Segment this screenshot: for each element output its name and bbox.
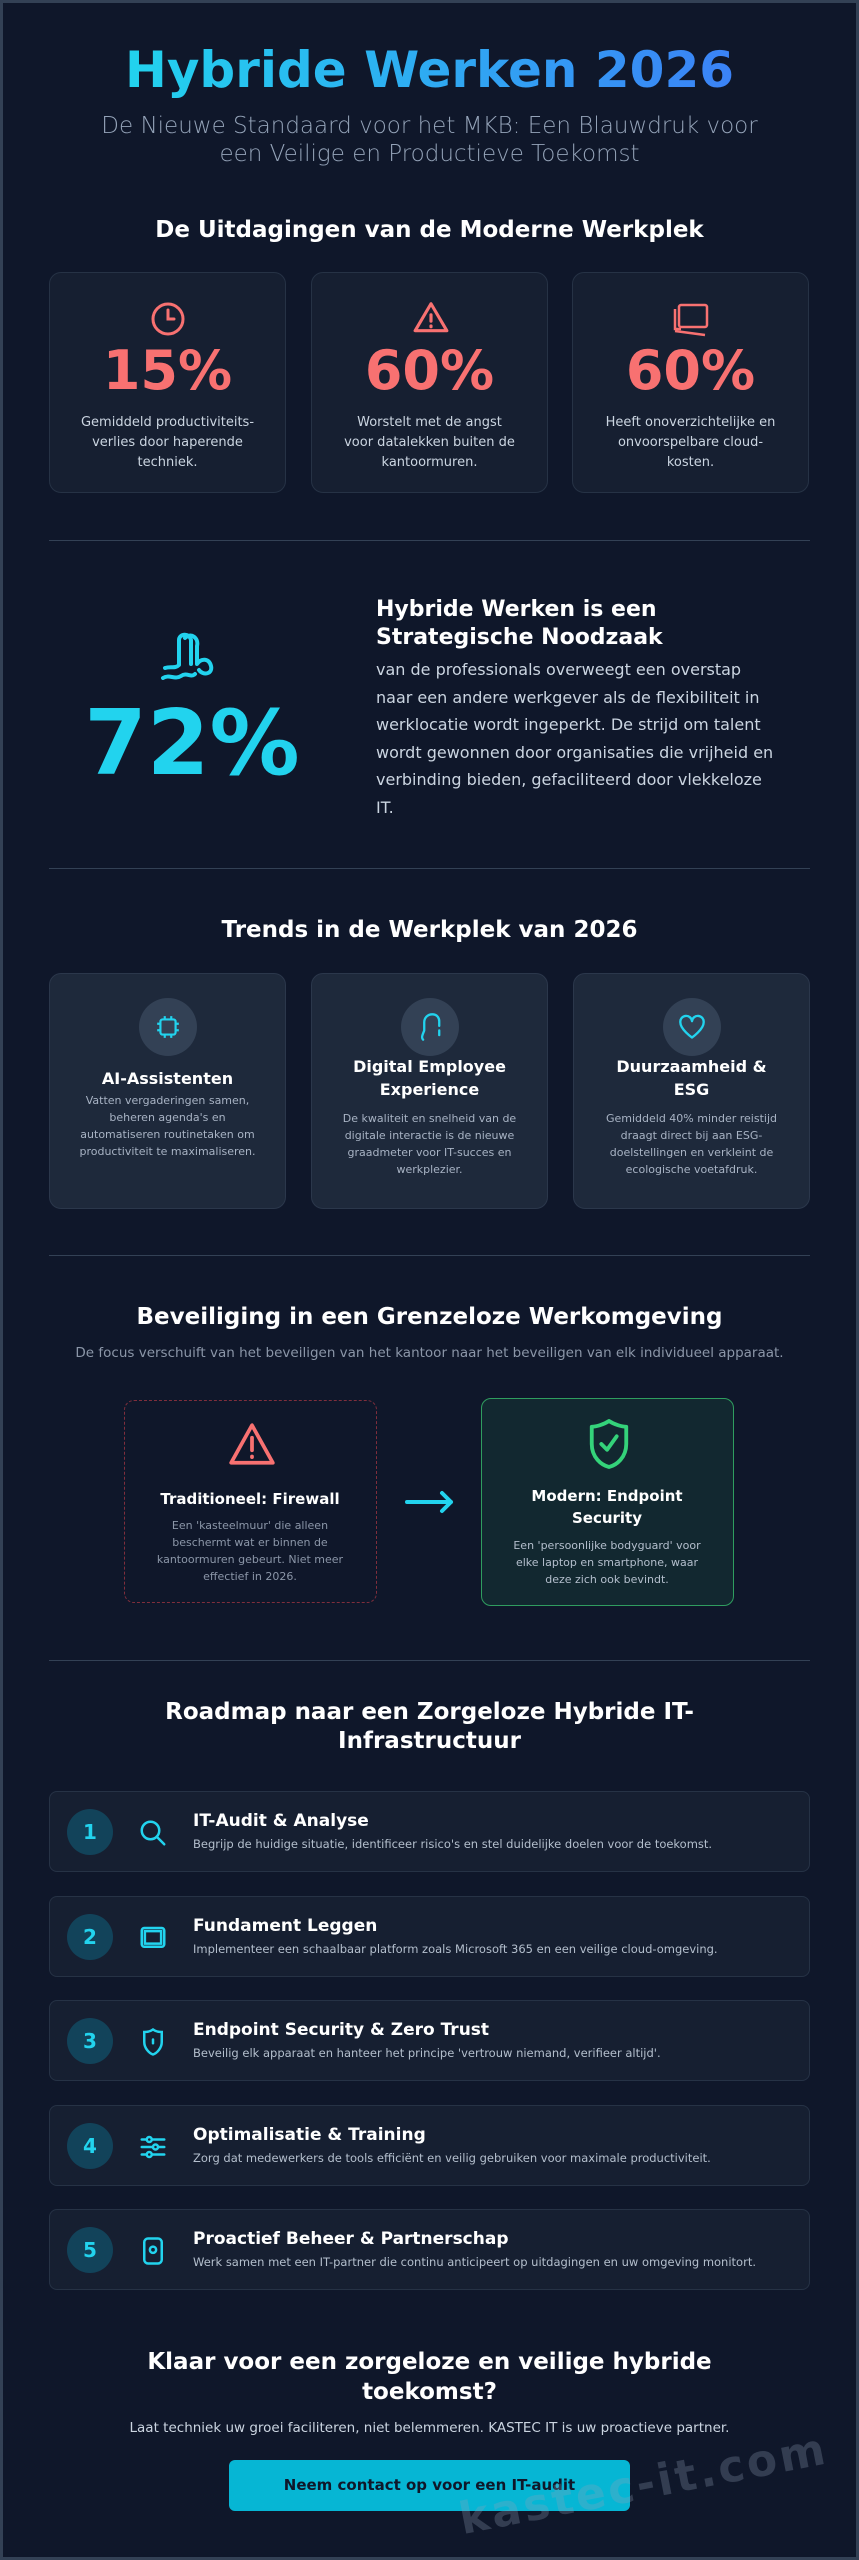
- card: ESG: Gemiddeld 40% minder reistijd draagt direct bij aan ESG-doelstellingen en verkleint de ecologische voetafdruk.: [606, 1112, 777, 1176]
- step 4: 4: [83, 2134, 97, 2158]
- card: ESG: Duurzaamheid & ESG: [616, 1057, 767, 1099]
- icon: hands: [160, 632, 214, 680]
- icon: device: [143, 2237, 163, 2265]
- step 5: Proactief Beheer & Partnerschap: [193, 2229, 509, 2249]
- card: DEX: Digital Employee Experience: [353, 1057, 506, 1099]
- stat 60%: 60%: [365, 339, 494, 402]
- step 4: Zorg dat medewerkers de tools efficiënt en veilig gebruiken voor maximale productiviteit.: [193, 2151, 711, 2165]
- step 4: [49, 2105, 810, 2186]
- panel: firewall vs endpoint: [124, 1398, 734, 1606]
- step 3: [49, 2000, 810, 2081]
- panel: trends: [49, 973, 810, 1209]
- icon: fingerprint: [401, 998, 459, 1056]
- CTA button: Neem contact op voor een IT-audit: [284, 2476, 575, 2494]
- heading: security: Beveiliging in een Grenzeloze Werkomgeving: [136, 1304, 722, 1330]
- step 2: [49, 1896, 810, 1977]
- heading: roadmap: Roadmap naar een Zorgeloze Hybride IT-Infrastructuur: [165, 1699, 694, 1754]
- box: modern endpoint security: [481, 1398, 734, 1606]
- box: traditional firewall: Een 'kasteelmuur' die alleen beschermt wat er binnen de kantoormuren gebeurt. Niet meer effectief in 2026.: [157, 1519, 343, 1583]
- icon: heart: [663, 998, 721, 1056]
- icon: screen: [140, 1926, 166, 1948]
- step 1: IT-Audit & Analyse: [193, 1811, 369, 1831]
- heading: challenges: De Uitdagingen van de Moderne Werkplek: [155, 217, 704, 243]
- panel: challenges: [49, 272, 809, 493]
- panel: 72% statistic: [84, 597, 773, 817]
- stat 60%: 60%: [626, 339, 755, 402]
- card: DEX: [311, 973, 548, 1209]
- text: Worstelt met de angst voor datalekken buiten de kantoormuren.: [344, 415, 515, 470]
- CTA text: Laat techniek uw groei faciliteren, niet belemmeren. KASTEC IT is uw proactieve partner.: [130, 2420, 729, 2436]
- arrow: [405, 1490, 454, 1514]
- box: traditional firewall: Traditioneel: Firewall: [160, 1490, 340, 1508]
- step 2: 2: [83, 1925, 97, 1949]
- watermark: kastec-it.com: [455, 2424, 832, 2545]
- card: data leaks: [311, 272, 548, 493]
- security subtitle: De focus verschuift van het beveiligen van het kantoor naar het beveiligen van elk individueel apparaat.: [75, 1345, 784, 1361]
- stat 72%: 72%: [84, 691, 300, 796]
- card: ESG: [573, 973, 810, 1209]
- panel: roadmap steps: [49, 1791, 810, 2290]
- text: Heeft onoverzichtelijke en onvoorspelbare cloud-kosten.: [606, 415, 775, 470]
- step 5: [49, 2209, 810, 2290]
- icon: chip: [139, 998, 197, 1056]
- step 3: Beveilig elk apparaat en hanteer het principe 'vertrouw niemand, verifieer altijd'.: [193, 2046, 661, 2060]
- step 1: Begrijp de huidige situatie, identificeer risico's en stel duidelijke doelen voor de toekomst.: [193, 1837, 712, 1851]
- stat 15%: 15%: [103, 339, 232, 402]
- icon: clock: [152, 302, 184, 336]
- step 5: 5: [83, 2238, 97, 2262]
- icon: stacked screens: [674, 304, 708, 336]
- box: modern endpoint security: Modern: Endpoint Security: [531, 1487, 683, 1527]
- card: DEX: De kwaliteit en snelheid van de digitale interactie is de nieuwe graadmeter voor IT-succes en werkplezier.: [343, 1112, 516, 1176]
- step 2: Fundament Leggen: [193, 1916, 377, 1936]
- card: productivity loss: [49, 272, 286, 493]
- step 4: Optimalisatie & Training: [193, 2125, 426, 2145]
- text: van de professionals overweegt een overstap naar een andere werkgever als de flexibiliteit in werklocatie wordt ingeperkt. De strijd om talent wordt gewonnen door organisaties die vrijheid en verbinding bieden, gefaciliteerd door vlekkeloze IT.: [376, 660, 773, 817]
- card: AI: Vatten vergaderingen samen, beheren agenda's en automatiseren routinetaken om productiviteit te maximaliseren.: [79, 1094, 256, 1158]
- card: cloud costs: [572, 272, 809, 493]
- text: Gemiddeld productiviteits-verlies door haperende techniek.: [81, 415, 254, 470]
- heading: trends: Trends in de Werkplek van 2026: [222, 917, 637, 943]
- step 5: Werk samen met een IT-partner die continu anticipeert op uitdagingen en uw omgeving monitort.: [193, 2255, 756, 2269]
- step 1: [49, 1791, 810, 1872]
- card: AI: [49, 973, 286, 1209]
- heading: Hybride Werken is een Strategische Noodzaak: [376, 597, 663, 650]
- box: modern endpoint security: Een 'persoonlijke bodyguard' voor elke laptop en smartphone, waar deze zich ook bevindt.: [513, 1539, 701, 1586]
- step 3: 3: [83, 2029, 97, 2053]
- box: traditional firewall: [124, 1400, 377, 1603]
- icon: sliders: [140, 2136, 166, 2158]
- card: AI: AI-Assistenten: [102, 1069, 233, 1088]
- icon: warning: [229, 1423, 275, 1465]
- icon: search: [140, 1820, 166, 1846]
- icon: shield: [143, 2028, 163, 2056]
- heading: call to action: Klaar voor een zorgeloze en veilige hybride toekomst?: [147, 2349, 712, 2405]
- CTA button: [229, 2460, 630, 2511]
- step 3: Endpoint Security & Zero Trust: [193, 2020, 489, 2040]
- icon: shield check: [590, 1419, 628, 1469]
- step 2: Implementeer een schaalbaar platform zoals Microsoft 365 en een veilige cloud-omgeving.: [193, 1942, 718, 1956]
- title: Hybride Werken 2026: [125, 41, 734, 99]
- icon: warning: [414, 302, 448, 332]
- step 1: 1: [83, 1820, 97, 1844]
- subtitle: De Nieuwe Standaard voor het MKB: Een Blauwdruk voor een Veilige en Productieve Toekomst: [101, 113, 758, 167]
